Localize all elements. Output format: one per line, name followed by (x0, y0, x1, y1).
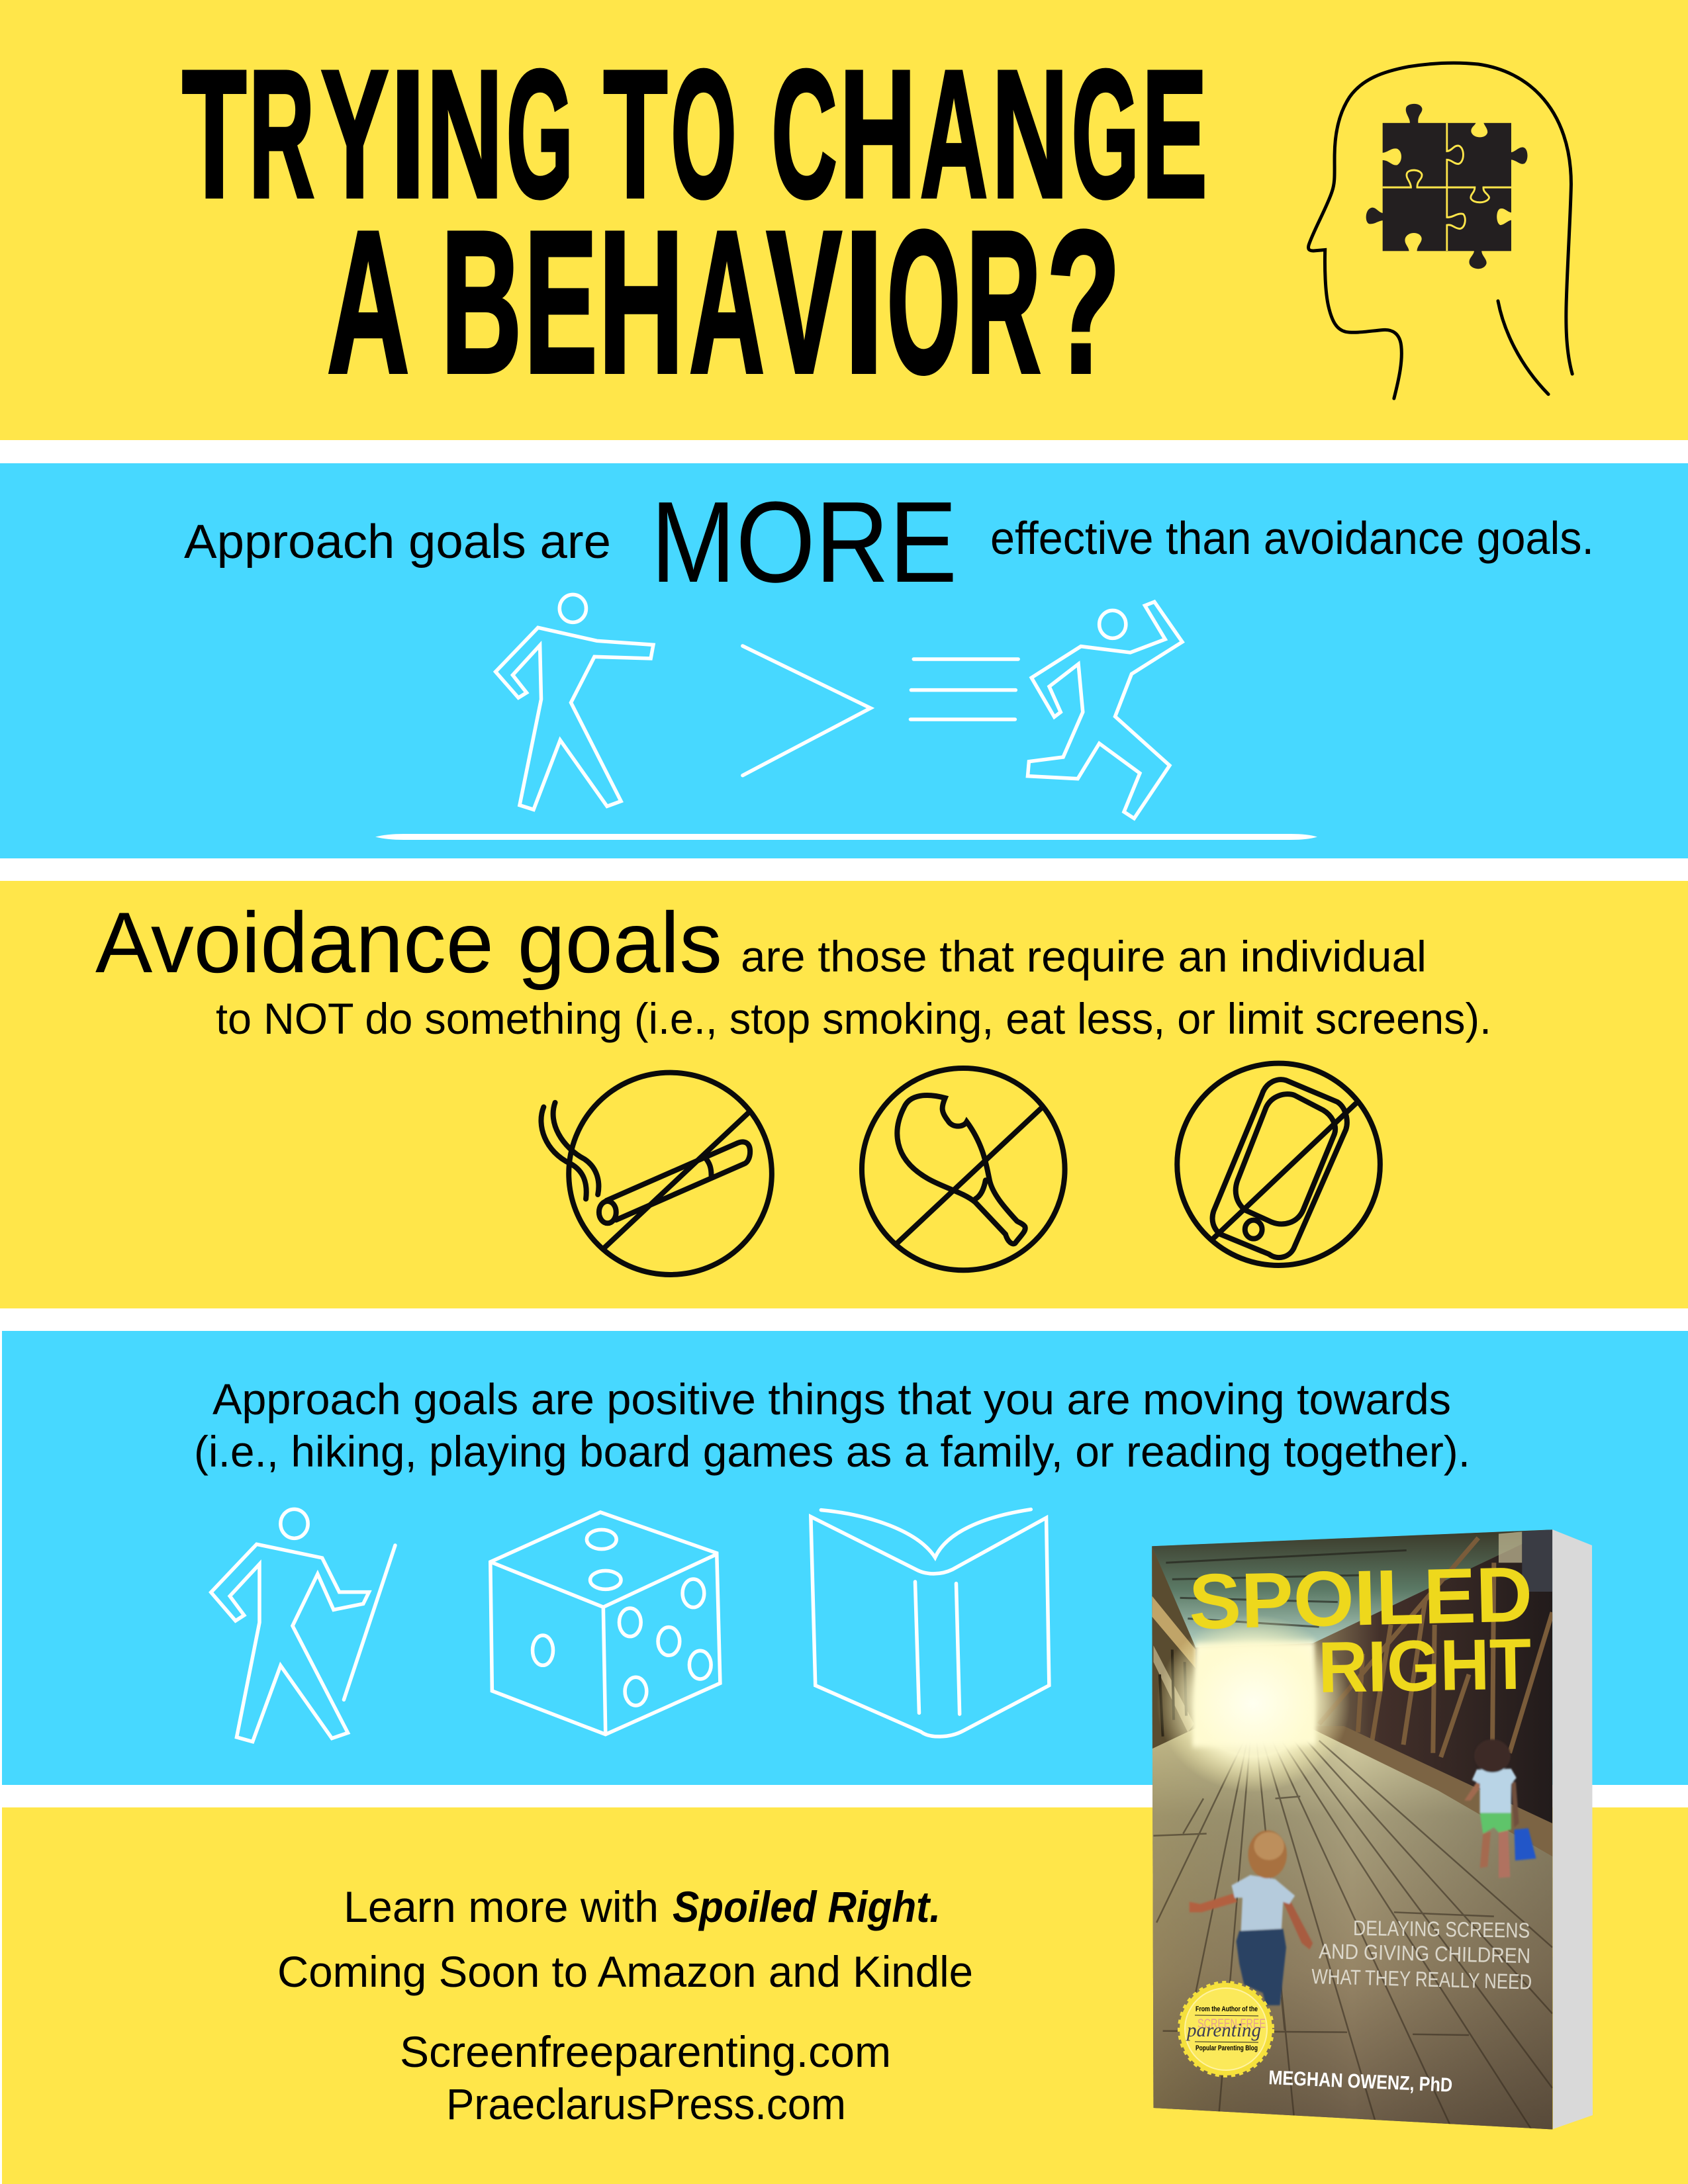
badge: SCREEN-FREE (1197, 2017, 1266, 2031)
panel: title band (0, 0, 1688, 440)
icon: no smoking (541, 1073, 772, 1275)
title: A (689, 189, 765, 415)
title: T (604, 33, 667, 236)
icon: walking figure (496, 594, 653, 809)
book title (1188, 1551, 1533, 1708)
title: N (426, 33, 503, 236)
title: E (524, 189, 597, 415)
icon: speed lines (910, 659, 1018, 719)
icon: dice (491, 1512, 720, 1735)
title: H (839, 33, 916, 236)
book subtitle (1311, 1916, 1532, 1994)
title: A (327, 189, 407, 415)
heading: approach goals sentence (184, 477, 1594, 606)
text: approach goals definition: Approach goals are positive things that you are moving towards (212, 1375, 1451, 1424)
title: T (182, 33, 246, 236)
diagram: walker less than runner (496, 594, 1182, 819)
title: G (1072, 33, 1139, 236)
badge: parenting (1186, 2019, 1261, 2041)
badge: Popular Parenting Blog (1196, 2044, 1258, 2052)
book subtitle: WHAT THEY REALLY NEED (1311, 1964, 1532, 1994)
small child (1464, 1739, 1536, 1878)
text: avoidance goals definition (95, 894, 1491, 1043)
title (182, 33, 1207, 415)
icon: no overeating (862, 1068, 1065, 1270)
title: R (249, 33, 314, 236)
text: avoidance goals definition: are those that require an individual (741, 932, 1427, 981)
title: B (441, 189, 522, 415)
book title: SPOILED (1188, 1551, 1533, 1646)
book cover photo (1150, 1525, 1556, 2138)
title: C (771, 33, 837, 236)
title: V (767, 189, 842, 415)
icons: prohibited behaviors (541, 1064, 1380, 1275)
title: A (920, 33, 988, 236)
icon: running figure (1028, 602, 1182, 819)
text: avoidance goals definition: to NOT do something (i.e., stop smoking, eat less, or limit screens). (216, 994, 1491, 1043)
badge (1180, 1983, 1272, 2075)
title: E (1142, 33, 1207, 236)
text: learn more call to action: Spoiled Right. (673, 1882, 941, 1931)
text: learn more call to action (277, 1882, 973, 1996)
icons: approach activities (211, 1509, 1049, 1742)
text: approach goals definition (194, 1375, 1470, 1476)
title: N (992, 33, 1068, 236)
panel: approach goals band (2, 1331, 1688, 1785)
icon: open book (811, 1510, 1049, 1737)
title: Y (321, 33, 389, 236)
title: H (598, 189, 684, 415)
head outline (1309, 63, 1572, 398)
badge: From the Author of the (1196, 2005, 1258, 2013)
icon: head with puzzle (1309, 63, 1572, 398)
large child (1190, 1831, 1313, 2005)
title: O (671, 33, 736, 236)
title: O (887, 189, 961, 415)
puzzle (1366, 104, 1527, 269)
text: learn more call to action: Learn more with (344, 1882, 659, 1931)
title: R (966, 189, 1041, 415)
book subtitle: DELAYING SCREENS (1353, 1916, 1530, 1942)
book spine side (1552, 1529, 1593, 2129)
title: G (506, 33, 573, 236)
panel: call to action band (2, 1807, 1688, 2184)
book subtitle: AND GIVING CHILDREN (1319, 1939, 1531, 1968)
heading: approach goals sentence: effective than avoidance goals. (990, 512, 1594, 564)
book mockup (1150, 1525, 1593, 2138)
text: websites (400, 2027, 891, 2128)
ground line (375, 834, 1317, 840)
text: websites: PraeclarusPress.com (446, 2079, 846, 2128)
text: approach goals definition: (i.e., hiking, playing board games as a family, or reading together). (194, 1427, 1470, 1476)
book title: RIGHT (1317, 1623, 1532, 1708)
title: I (843, 189, 884, 415)
book author: MEGHAN OWENZ, PhD (1268, 2067, 1453, 2097)
panel: approach vs avoidance band (0, 463, 1688, 858)
text: websites: Screenfreeparenting.com (400, 2027, 891, 2076)
heading: approach goals sentence: Approach goals are (184, 516, 611, 569)
icon: greater than sign (743, 646, 870, 776)
heading: approach goals sentence: MORE (651, 477, 957, 606)
text: learn more call to action: Coming Soon to Amazon and Kindle (277, 1947, 973, 1996)
panel: avoidance goals band (0, 881, 1688, 1308)
icon: no screens (1177, 1064, 1380, 1265)
title: I (390, 33, 426, 236)
title: ? (1047, 189, 1121, 415)
icon: hiker (211, 1509, 395, 1742)
text: avoidance goals definition: Avoidance goals (95, 894, 722, 991)
